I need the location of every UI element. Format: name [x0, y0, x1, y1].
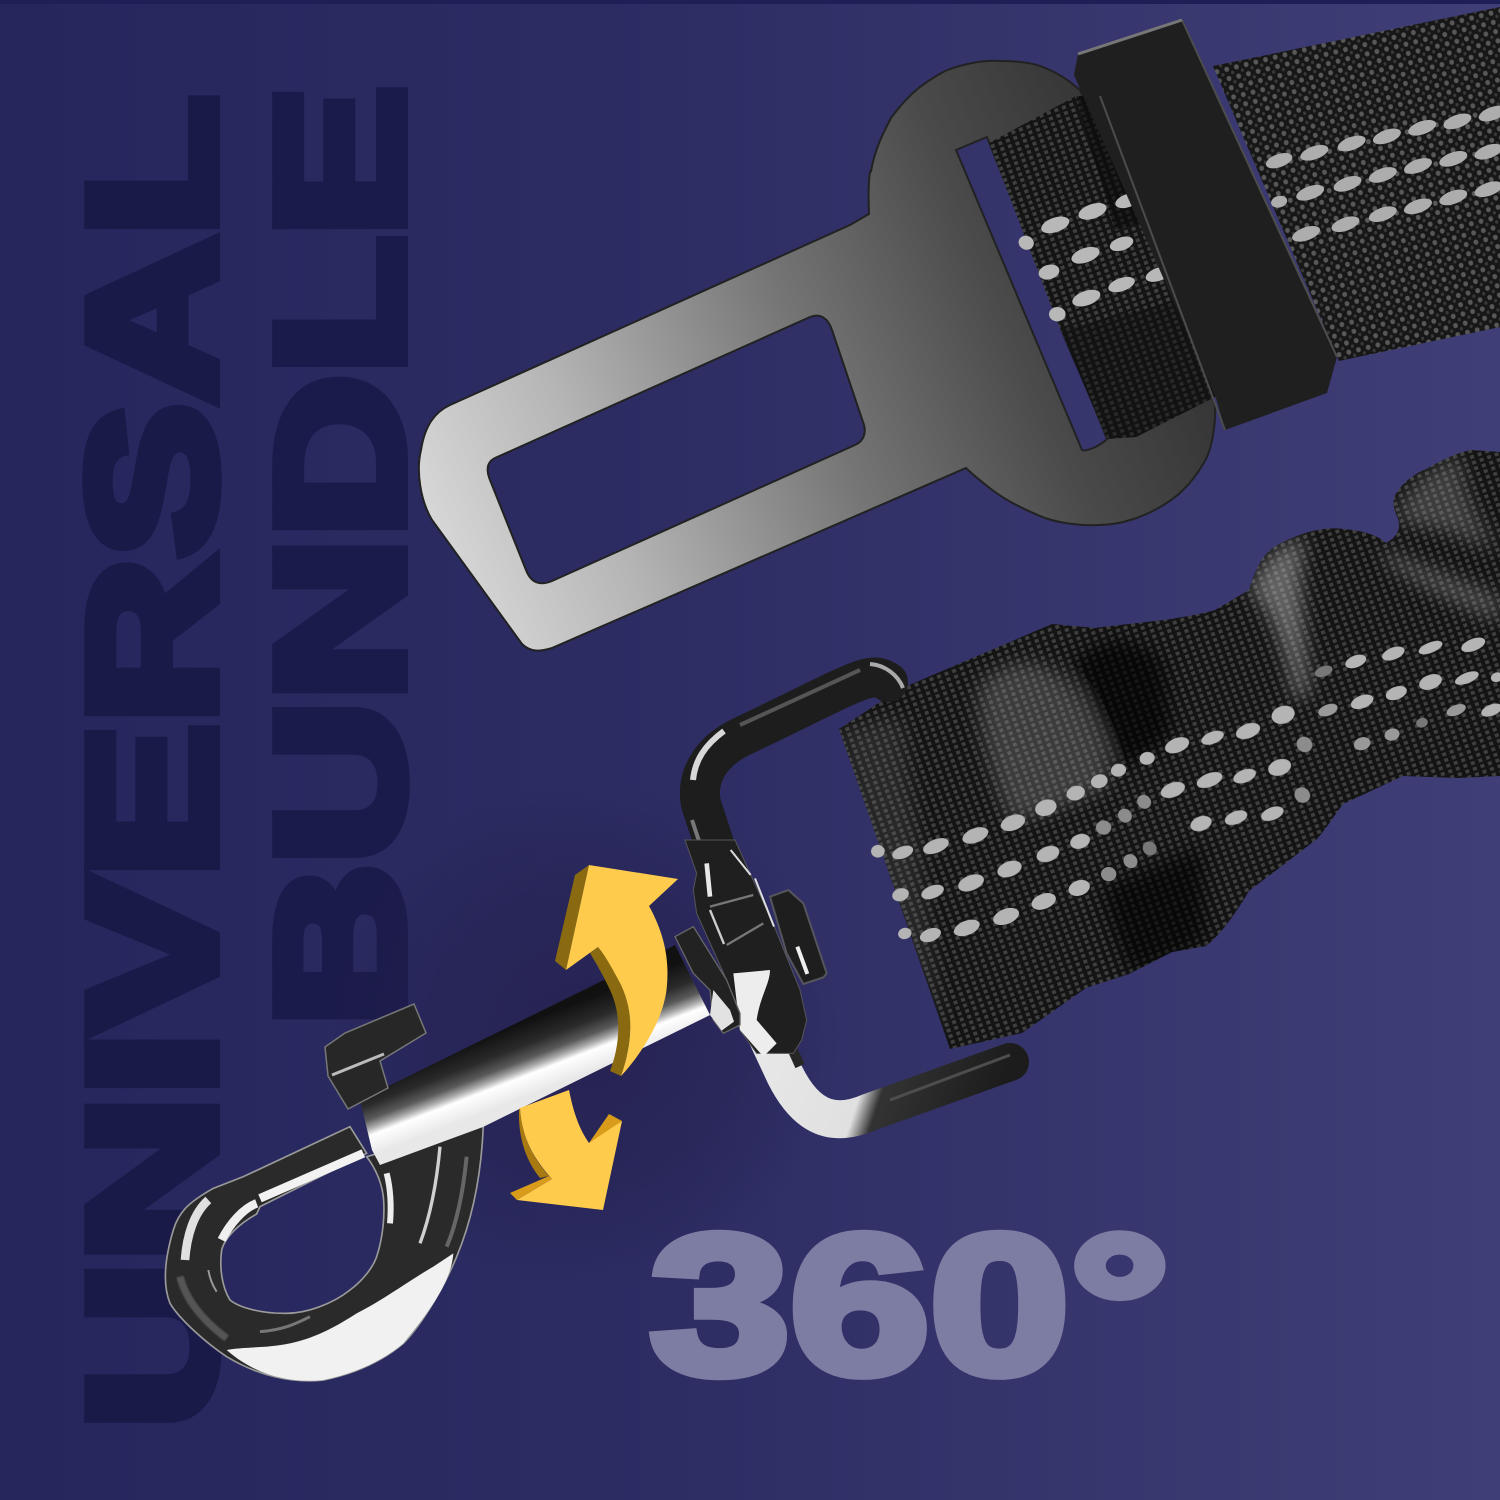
shaft — [360, 945, 710, 1165]
bungee strap — [839, 450, 1500, 1049]
D-ring lower — [750, 1000, 1010, 1119]
seat belt strap — [1213, 7, 1500, 361]
latch — [325, 1004, 426, 1109]
arrow: upward rotation — [555, 865, 678, 1076]
rotation shadow glow — [330, 780, 840, 1290]
vertical heading: UNIVERSAL: UNIVERSAL — [52, 96, 253, 1429]
hook body — [165, 1123, 483, 1381]
arrow: downward rotation — [510, 1090, 622, 1210]
reflective stitching on strap — [1263, 102, 1500, 245]
hook highlights — [260, 1153, 363, 1198]
swivel assembly — [675, 840, 827, 1057]
seat belt buckle — [419, 61, 1215, 651]
fold shading — [839, 456, 1500, 1045]
D-ring upper — [700, 677, 888, 880]
swivel bolt — [770, 890, 827, 984]
hook white band — [227, 1253, 453, 1381]
reflective stitching on bungee — [869, 635, 1500, 945]
reflective stitching on loop — [1016, 190, 1175, 324]
swivel snap hook — [165, 664, 1010, 1381]
shaft collar — [675, 927, 740, 1033]
vertical heading: BUNDLE: BUNDLE — [240, 86, 441, 1027]
inner strap loop — [989, 96, 1217, 439]
swivel body — [685, 840, 807, 1053]
360 degree label: 360° — [650, 1194, 1170, 1415]
plastic keeper — [1074, 20, 1337, 430]
